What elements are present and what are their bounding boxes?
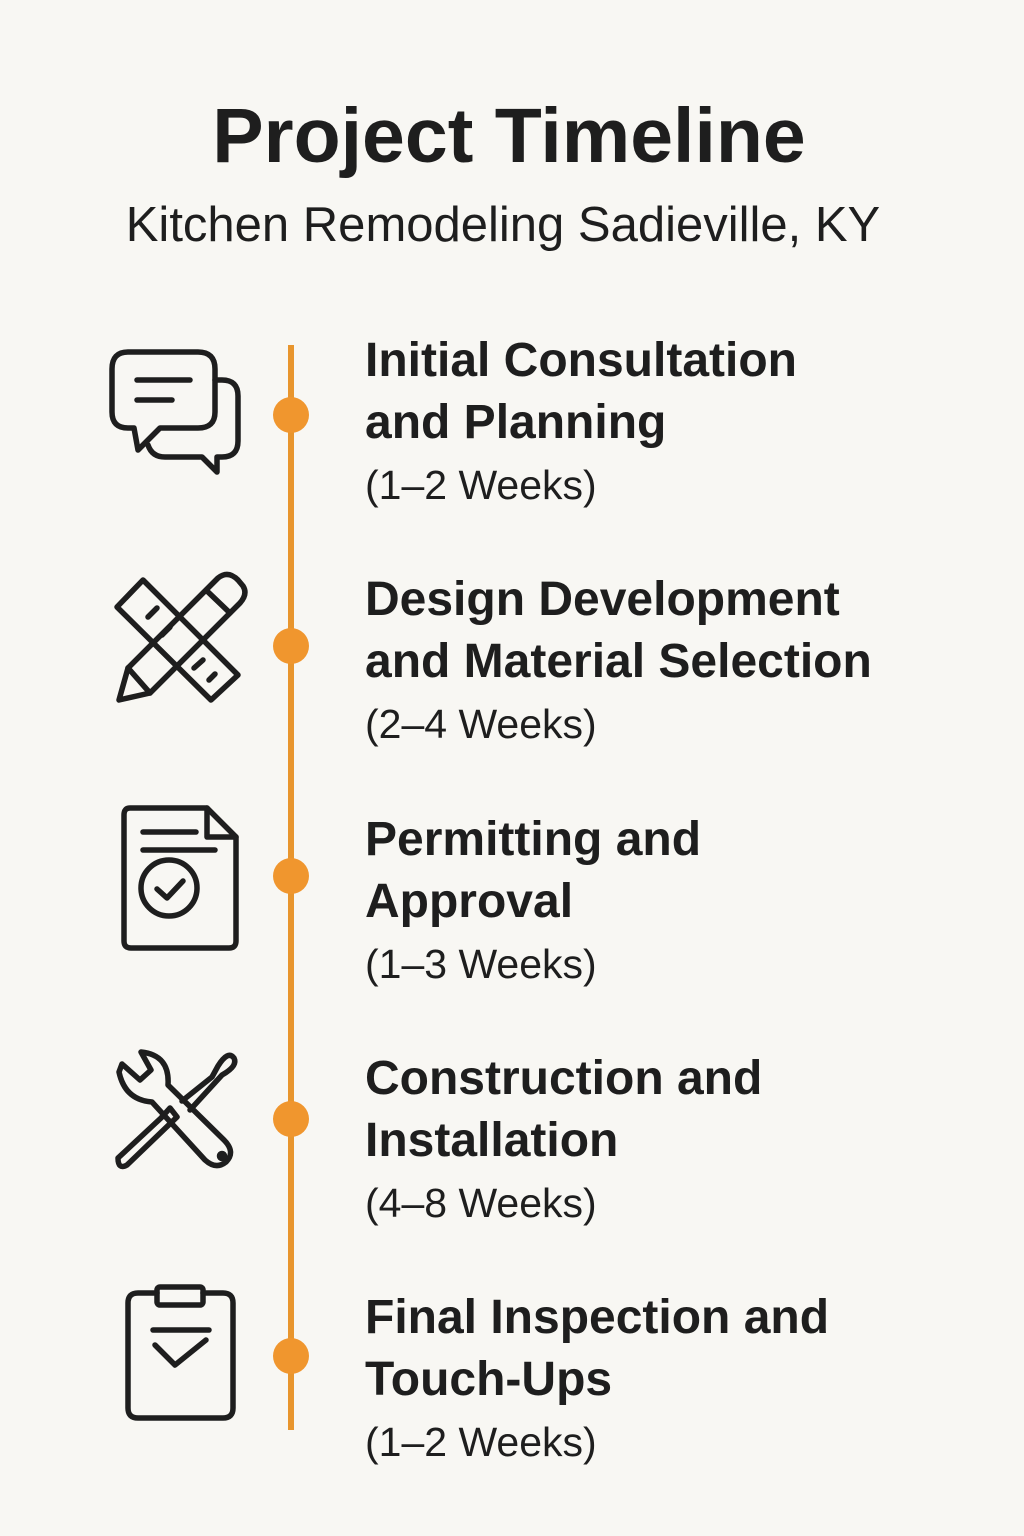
step 1: and Planning xyxy=(365,396,666,449)
step 2: and Material Selection xyxy=(365,635,872,688)
step 5 xyxy=(365,1291,829,1465)
step 2 xyxy=(365,573,872,747)
step 1: (1–2 Weeks) xyxy=(365,462,597,508)
step 3: Permitting and xyxy=(365,813,701,866)
step 3 xyxy=(365,813,701,987)
step 4: (4–8 Weeks) xyxy=(365,1180,597,1226)
subtitle: Kitchen Remodeling Sadieville, KY xyxy=(126,198,880,252)
step 4: Installation xyxy=(365,1114,618,1167)
step 3: (1–3 Weeks) xyxy=(365,941,597,987)
step 4 xyxy=(365,1052,762,1226)
step 2: Design Development xyxy=(365,573,840,626)
step 5: (1–2 Weeks) xyxy=(365,1419,597,1465)
step 5: Final Inspection and xyxy=(365,1291,829,1344)
step 3: Approval xyxy=(365,875,573,928)
step 5: Touch-Ups xyxy=(365,1353,612,1406)
step 2: (2–4 Weeks) xyxy=(365,701,597,747)
step 1 xyxy=(365,334,797,508)
step 4: Construction and xyxy=(365,1052,762,1105)
step 1: Initial Consultation xyxy=(365,334,797,387)
title: Project Timeline xyxy=(212,93,806,179)
